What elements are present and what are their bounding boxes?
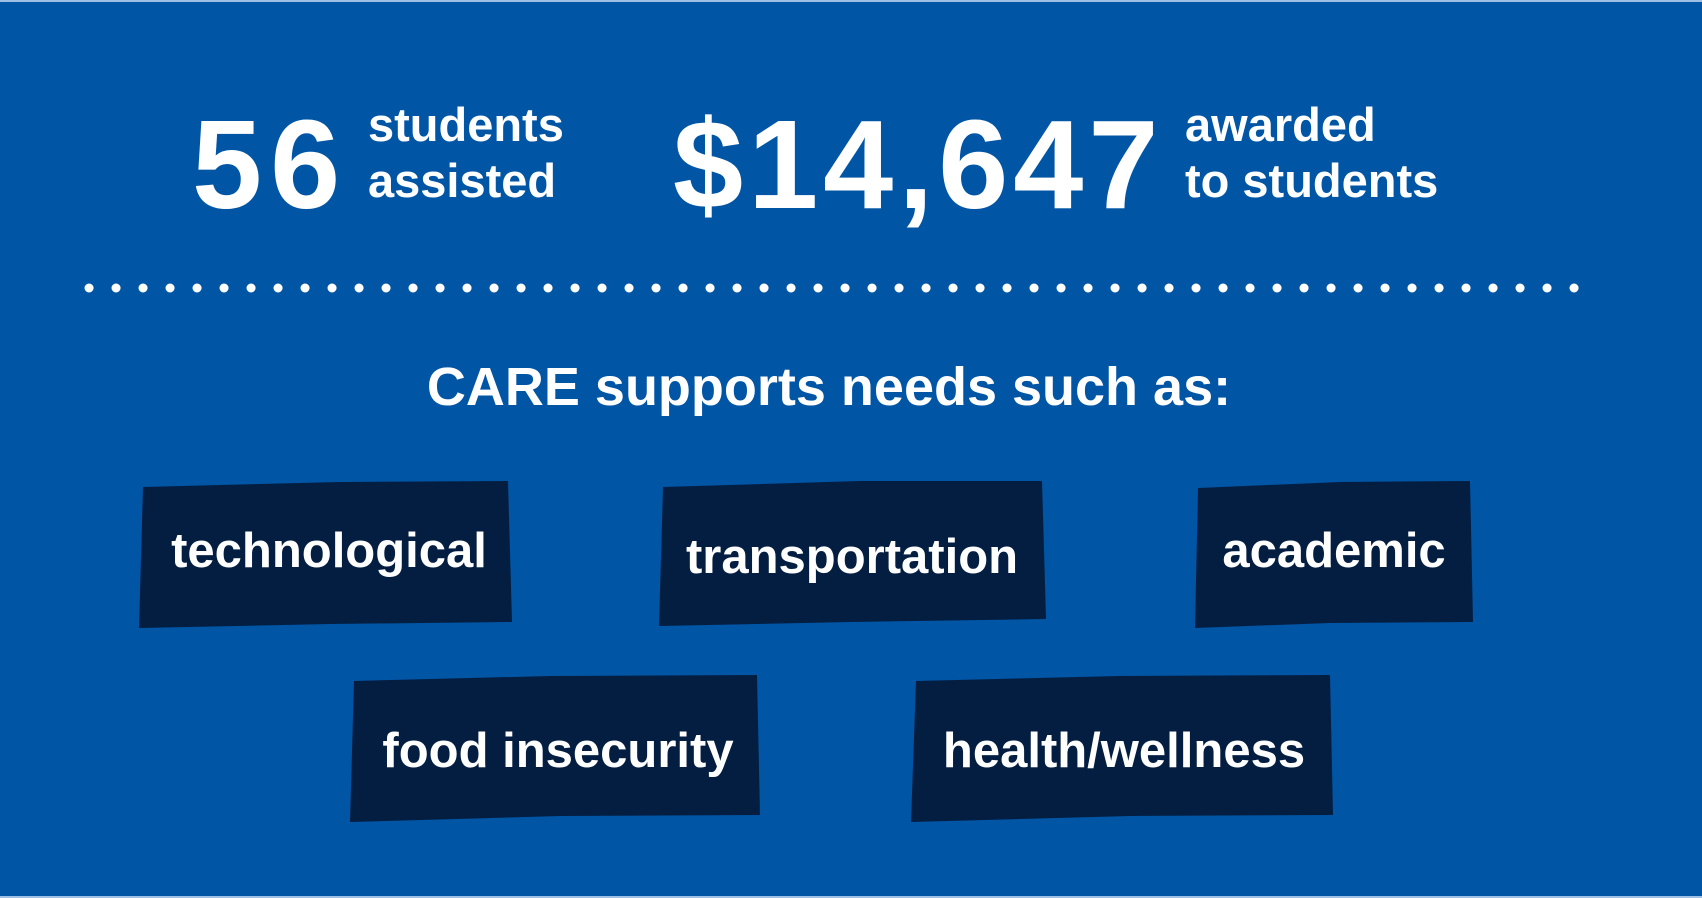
box: technological: technological [171, 524, 487, 578]
box: technological [139, 481, 512, 628]
stat: $14,647 awarded to students [673, 94, 1438, 235]
box: transportation [659, 481, 1046, 626]
stat: 56 students assisted: students [368, 98, 564, 151]
box: health/wellness [911, 675, 1333, 822]
stat: 56 students assisted: assisted [368, 154, 556, 207]
stat: 56 students assisted: 56 [192, 94, 348, 235]
stat: 56 students assisted [192, 94, 564, 235]
box: academic [1195, 481, 1473, 628]
box: transportation: transportation [686, 530, 1018, 584]
stat: $14,647 awarded to students: $14,647 [673, 94, 1163, 235]
heading: CARE supports needs such as: CARE supports needs such as: [427, 357, 1231, 417]
stat: $14,647 awarded to students: awarded [1185, 98, 1376, 151]
stat: $14,647 awarded to students: to students [1185, 154, 1438, 207]
box: food insecurity: food insecurity [382, 724, 734, 778]
box: food insecurity [350, 675, 760, 822]
box: academic: academic [1222, 524, 1446, 578]
box: health/wellness: health/wellness [943, 724, 1305, 778]
